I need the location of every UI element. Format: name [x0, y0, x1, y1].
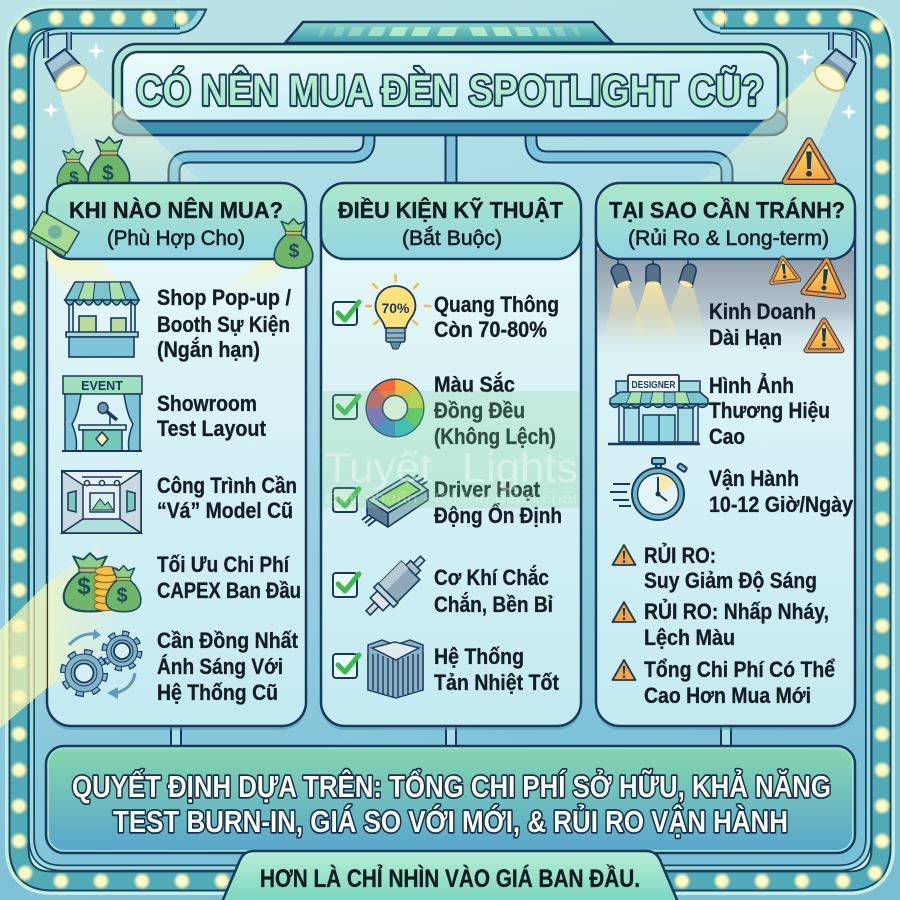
watermark: Đèn chuẩn - Không giảm chất [325, 490, 579, 507]
list text: why avoid: RỦI RO: [644, 543, 716, 568]
icon: colour wheel [366, 378, 424, 438]
icon: warning cluster [769, 256, 846, 350]
title top tab with stripes [285, 22, 613, 43]
icon: money and coins [64, 553, 141, 612]
icon: money bag on header: $ [289, 241, 300, 262]
list text: when to buy: Tối Ưu Chi Phí [157, 552, 290, 577]
heading: TẠI SAO CẦN TRÁNH? [609, 196, 845, 223]
list text: why avoid: 10-12 Giờ/Ngày [709, 492, 854, 517]
icon: event stage: EVENT [81, 379, 123, 393]
spotlight beam: top left [58, 70, 205, 185]
spotlight beam: top right [698, 68, 843, 185]
watermark: Lights [462, 444, 578, 491]
icon: gallery room [62, 471, 141, 533]
panel: why avoid [596, 183, 855, 730]
panel light beams [47, 245, 294, 688]
icon: light bulb 70%: 70% [381, 300, 410, 316]
list text: why avoid: RỦI RO: Nhấp Nháy, [644, 599, 829, 624]
list text: when to buy: “Vá” Model Cũ [157, 498, 293, 523]
subheading: (Phù Hợp Cho) [107, 227, 245, 250]
list text: when to buy: Cần Đồng Nhất [157, 628, 299, 653]
title text: CÓ NÊN MUA ĐÈN SPOTLIGHT CŨ? [136, 66, 764, 115]
list text: when to buy: Ánh Sáng Với [157, 654, 283, 679]
icon: light bulb 70% [366, 275, 430, 349]
list text: why avoid: Tổng Chi Phí Có Thể [644, 657, 835, 682]
decision banner [46, 746, 855, 853]
callout text: HƠN LÀ CHỈ NHÌN VÀO GIÁ BAN ĐẦU. [260, 863, 640, 893]
list text: when to buy: Hệ Thống Cũ [157, 680, 278, 705]
icon: designer storefront: DESIGNER [632, 380, 676, 391]
spotlight: top left lamp [41, 32, 105, 118]
list text: when to buy: Công Trình Cần [157, 473, 297, 498]
title panel [113, 44, 787, 135]
heading: KHI NÀO NÊN MUA? [69, 196, 283, 223]
list text: technical conditions: Driver Hoạt [434, 477, 541, 502]
money bags behind left panel [57, 137, 130, 192]
list text: technical conditions: Động Ổn Định [434, 503, 562, 528]
icon: stopwatch [610, 458, 687, 520]
heading: ĐIỀU KIỆN KỸ THUẬT [338, 196, 564, 223]
panel: technical conditions [321, 183, 581, 730]
list text: technical conditions: Tản Nhiệt Tốt [434, 670, 560, 695]
list text: when to buy: Showroom [157, 391, 257, 416]
list text: when to buy: (Ngắn hạn) [157, 337, 260, 362]
list text: technical conditions: Màu Sắc [434, 372, 515, 397]
icon: three stage lamps [603, 259, 708, 345]
icon: money and coins: $ [116, 585, 128, 607]
watermark: Tuyết [324, 444, 432, 491]
list text: when to buy: Test Layout [157, 416, 267, 441]
list text: when to buy [157, 285, 301, 705]
watermark [322, 391, 580, 508]
icon: checkboxes [333, 302, 359, 678]
icon: mechanical part [358, 549, 432, 623]
list text: why avoid: Cao Hơn Mua Mới [644, 683, 811, 708]
list text: why avoid: Lệch Màu [644, 625, 735, 650]
banner text line 2: TEST BURN-IN, GIÁ SO VỚI MỚI, & RỦI RO VẬN HÀNH [113, 803, 788, 839]
list text: technical conditions: (Không Lệch) [434, 424, 556, 449]
connectors from title to panels [174, 135, 727, 746]
list text: why avoid [644, 299, 854, 708]
list text: when to buy: Shop Pop-up / [157, 285, 291, 310]
money bags behind left panel: $ [69, 168, 79, 187]
icon: LED driver [362, 475, 428, 527]
list text: why avoid: Vận Hành [709, 466, 799, 491]
spotlight beam: left side [0, 583, 47, 728]
list text: technical conditions: Còn 70-80% [434, 317, 547, 342]
icon: gears [64, 629, 138, 699]
icon: event stage [62, 376, 142, 451]
icon: money and coins: $ [77, 573, 91, 600]
subheading: (Rủi Ro & Long-term) [628, 227, 829, 250]
list text: technical conditions: Hệ Thống [434, 644, 524, 669]
list text: technical conditions: Cơ Khí Chắc [434, 565, 549, 590]
icon: small warnings [612, 545, 636, 680]
money bags behind left panel: $ [102, 162, 114, 185]
list text: why avoid: Hình Ảnh [709, 373, 794, 398]
list text: when to buy: Booth Sự Kiện [157, 312, 290, 337]
list text: technical conditions: Quang Thông [434, 292, 559, 317]
list text: why avoid: Dài Hạn [709, 325, 782, 350]
icon: banknote [28, 211, 79, 257]
panel: when to buy [47, 183, 306, 730]
list text: technical conditions [434, 292, 562, 695]
icon: warning above right panel [786, 141, 832, 181]
list text: technical conditions: Chắn, Bền Bỉ [434, 592, 553, 617]
icon: money bag on header [274, 219, 313, 268]
bottom callout pill [222, 851, 678, 900]
list text: why avoid: Suy Giảm Độ Sáng [644, 568, 817, 593]
list text: when to buy: CAPEX Ban Đầu [157, 578, 301, 603]
list text: technical conditions: Đồng Đều [434, 398, 525, 423]
list text: why avoid: Thương Hiệu [709, 398, 830, 423]
subheading: (Bắt Buộc) [402, 227, 502, 250]
list text: why avoid: Cao [709, 424, 745, 449]
list text: why avoid: Kinh Doanh [709, 299, 816, 324]
icon: designer storefront [608, 375, 708, 444]
spotlight: top right lamp [796, 32, 860, 120]
icon: pop-up shop [65, 282, 139, 357]
icon: heatsink [368, 640, 423, 698]
